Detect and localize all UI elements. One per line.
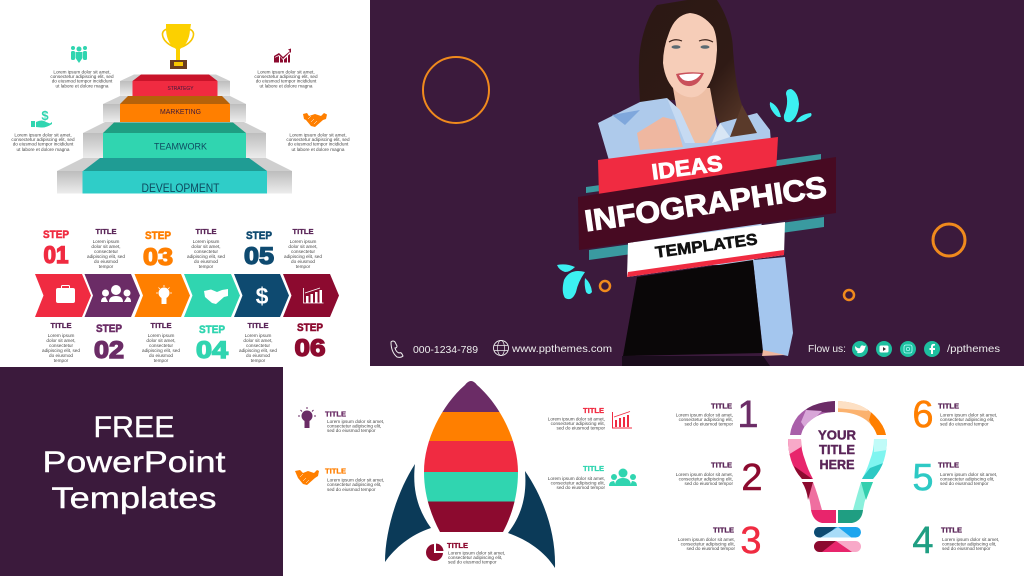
text: bottom title C: adipiscing elit, sed	[239, 348, 277, 353]
text: lower right description: consectetur adipiscing elit, sed	[286, 137, 350, 142]
text: pie item: sed do eiusmod tempor	[448, 560, 497, 564]
item 4: sed do eiusmod tempor	[942, 546, 991, 551]
text: team item: TITLE	[583, 464, 604, 473]
text: bottom title B: consectetur	[149, 343, 173, 348]
text: top title B	[187, 227, 225, 269]
icon: handshake	[295, 470, 319, 485]
item 2	[676, 457, 763, 499]
text: top title B: adipiscing elit, sed	[187, 254, 225, 259]
step 06	[294, 322, 326, 362]
item 4: consectetur adipiscing elit,	[942, 542, 996, 546]
item 6: TITLE	[938, 402, 959, 410]
icon: money in hand	[31, 108, 52, 128]
text: chart item: Lorem ipsum dolor sit amet,	[548, 416, 605, 422]
footer: website	[494, 340, 612, 356]
text: bottom title B: adipiscing elit, sed	[142, 348, 180, 353]
text: top left description: consectetur adipiscing elit, sed	[50, 74, 114, 79]
text: lower left description: consectetur adipiscing elit, sed	[11, 137, 75, 142]
footer: phone: 000-1234-789	[413, 344, 478, 356]
ribbon: infographics: INFOGRAPHICS	[583, 171, 829, 238]
decoration: medium orange ring	[933, 224, 965, 256]
text: team item: sed do eiusmod tempor	[556, 485, 605, 490]
item 1: 1	[737, 394, 759, 436]
step: strategy	[132, 74, 218, 96]
text: top left description: Lorem ipsum dolor sit amet,	[53, 70, 111, 74]
text: top title C: consectetur	[291, 249, 315, 254]
item 2: TITLE	[711, 460, 732, 470]
text: lower left description: do eiusmod tempor incididunt	[13, 142, 74, 146]
panel: rocket infographic	[295, 378, 637, 568]
text: handshake item	[325, 466, 384, 492]
item 2: consectetur adipiscing elit,	[679, 476, 733, 482]
text: handshake item: Lorem ipsum dolor sit amet,	[327, 478, 384, 482]
step 05	[244, 230, 274, 270]
step 02	[94, 323, 124, 364]
bulb: left lower segment	[802, 482, 822, 510]
text: bottom title A: tempor	[54, 358, 69, 363]
item 2: Lorem ipsum dolor sit amet,	[676, 472, 733, 477]
rocket left fin	[385, 464, 431, 562]
step: development: DEVELOPMENT	[142, 183, 220, 195]
decoration: large orange ring	[423, 57, 489, 123]
step 05: STEP	[246, 230, 272, 242]
text: top title B: Lorem ipsum	[193, 239, 220, 244]
text: pie item: TITLE	[447, 541, 468, 550]
bulb: right upper segment	[862, 439, 887, 479]
step 06: 06	[294, 335, 326, 362]
footer: social links: /ppthemes	[947, 343, 1000, 355]
decoration: cyan splash bottom	[557, 264, 592, 299]
panel: chevron process	[35, 227, 339, 364]
text: top left description: do eiusmod tempor incididunt	[52, 78, 113, 84]
step: marketing	[120, 96, 230, 122]
item 3: TITLE	[713, 526, 734, 534]
bulb: bottom right segment	[838, 510, 863, 523]
step 04	[196, 324, 229, 364]
bulb: title: HERE	[820, 457, 855, 472]
text: top title B: consectetur	[194, 249, 218, 254]
text: top left description	[50, 70, 114, 88]
text: top title C: adipiscing elit, sed	[284, 254, 322, 259]
step 01	[43, 229, 69, 269]
step 01: 01	[44, 242, 68, 269]
bulb: title: YOUR	[818, 428, 857, 442]
item 1: TITLE	[711, 402, 732, 410]
footer: social links	[808, 341, 1000, 357]
text: chart item	[548, 406, 605, 430]
text: handshake item: TITLE	[325, 466, 346, 476]
item 4: TITLE	[941, 526, 962, 534]
bulb: left upper segment	[788, 439, 813, 479]
step 04: 04	[196, 337, 229, 364]
text: bottom title C: tempor	[251, 358, 266, 363]
panel: free templates caption	[0, 367, 283, 576]
item 3: sed do eiusmod tempor	[686, 546, 735, 551]
step 03: 03	[143, 244, 173, 271]
text: bulb item	[325, 410, 384, 433]
icon: bar chart	[612, 412, 632, 428]
text: top title C: do eiusmod	[291, 259, 315, 264]
step 03: STEP	[145, 230, 171, 242]
bulb: top right segment	[838, 401, 886, 435]
icon: growth chart	[274, 48, 291, 62]
item 5: TITLE	[938, 460, 959, 470]
bulb: screw band two	[814, 541, 861, 552]
item 3: Lorem ipsum dolor sit amet,	[678, 537, 735, 542]
chevron 5	[234, 274, 289, 317]
text: bottom title A: TITLE	[50, 321, 72, 330]
text: bottom title C: consectetur	[246, 343, 270, 348]
text: top right description: Lorem ipsum dolor sit amet,	[257, 70, 315, 74]
step 03	[143, 230, 173, 271]
text: top title C: TITLE	[292, 227, 314, 236]
step 02: STEP	[96, 323, 122, 335]
text: lower right description: Lorem ipsum dolor sit amet,	[289, 132, 347, 138]
item 3	[678, 520, 762, 562]
panel: hero banner	[370, 0, 1024, 366]
text: top title B: TITLE	[196, 227, 216, 236]
text: bottom title C: do eiusmod	[246, 353, 270, 358]
bulb: title	[818, 428, 857, 472]
step: teamwork	[103, 122, 246, 158]
rocket body	[420, 378, 522, 532]
text: bottom title A: do eiusmod	[49, 353, 73, 358]
item 2: 2	[741, 457, 763, 499]
text: bottom title A: consectetur	[49, 343, 73, 348]
text: top title A: do eiusmod	[94, 259, 118, 264]
text: lower left description: Lorem ipsum dolor sit amet,	[14, 132, 72, 138]
item 5: consectetur adipiscing elit,	[940, 476, 994, 482]
item 6: 6	[912, 394, 934, 436]
text: top title A: TITLE	[96, 227, 116, 236]
footer: phone	[391, 341, 478, 357]
ribbon: templates	[627, 222, 785, 277]
text: bottom title A: dolor sit amet,	[46, 338, 76, 343]
chevron 2	[84, 274, 140, 317]
item 5: 5	[912, 457, 934, 499]
item 4	[912, 520, 999, 562]
text: chart item: sed do eiusmod tempor	[556, 426, 605, 430]
icon: team	[609, 468, 637, 486]
text: bottom title A	[42, 321, 80, 363]
text: bottom title B	[142, 321, 180, 363]
item 4: 4	[912, 520, 934, 562]
text: top title A: consectetur	[94, 249, 118, 254]
text: bottom title B: dolor sit amet,	[146, 338, 176, 343]
panel: staircase infographic	[11, 24, 350, 195]
item 6: sed do eiusmod tempor	[940, 422, 989, 426]
step: strategy: STRATEGY	[168, 86, 194, 92]
text: bottom title C: Lorem ipsum	[245, 333, 272, 338]
text: top title A	[87, 227, 125, 269]
text: bottom title A: Lorem ipsum	[48, 333, 75, 338]
text: bottom title B: do eiusmod	[149, 353, 173, 358]
ribbon: ideas: IDEAS	[650, 151, 724, 185]
text: top title A: dolor sit amet,	[91, 244, 121, 249]
bulb: right lower segment	[853, 482, 873, 510]
item 3: consectetur adipiscing elit,	[681, 542, 735, 546]
text: top left description: ut labore et dolore magna	[56, 84, 109, 88]
item 6	[912, 394, 997, 436]
item 1: consectetur adipiscing elit,	[679, 417, 733, 422]
text: bottom title B: tempor	[154, 358, 169, 363]
bulb: bottom left segment	[811, 510, 836, 523]
text: top title C	[284, 227, 322, 269]
bulb: screw band one	[814, 527, 861, 538]
ribbon: ideas	[598, 137, 778, 197]
text: top title A: Lorem ipsum	[93, 239, 120, 244]
item 6: consectetur adipiscing elit,	[940, 417, 994, 422]
panel: light bulb infographic	[676, 394, 999, 562]
decoration: small orange ring right	[844, 290, 854, 300]
decoration: small orange ring left	[600, 281, 610, 291]
footer: website: www.ppthemes.com	[511, 343, 612, 355]
text: bottom title A: adipiscing elit, sed	[42, 348, 80, 353]
text: top title C: Lorem ipsum	[290, 239, 317, 244]
text: top right description	[254, 70, 318, 88]
ribbon: infographics	[578, 157, 836, 250]
text: lower right description	[286, 132, 350, 152]
text: top title A: adipiscing elit, sed	[87, 254, 125, 259]
text: pie item: Lorem ipsum dolor sit amet,	[448, 550, 505, 556]
text: handshake item: consectetur adipiscing elit,	[327, 482, 381, 487]
bulb: top left segment	[790, 401, 835, 435]
step: teamwork: TEAMWORK	[154, 142, 208, 152]
step 02: 02	[94, 337, 124, 364]
text: chart item: TITLE	[583, 406, 604, 415]
chevron 6	[283, 274, 339, 317]
heading: powerpoint: PowerPoint	[42, 446, 226, 479]
text: top title C: dolor sit amet,	[288, 244, 318, 249]
icon: trophy	[162, 24, 194, 69]
text: lower right description: ut labore et dolore magna	[292, 147, 345, 152]
chevron 5: $	[256, 283, 269, 309]
chevron 1	[35, 274, 91, 317]
item 1: Lorem ipsum dolor sit amet,	[676, 412, 733, 418]
text: bottom title B: Lorem ipsum	[148, 333, 175, 338]
text: top title A: tempor	[99, 264, 114, 269]
text: top right description: do eiusmod tempor incididunt	[256, 78, 317, 84]
text: bulb item: sed do eiusmod tempor	[327, 428, 376, 433]
text: pie item: consectetur adipiscing elit,	[448, 555, 502, 560]
step: development	[82, 158, 267, 195]
item 5	[912, 457, 997, 499]
ribbon: templates: TEMPLATES	[654, 231, 759, 262]
photo: woman pointing	[598, 0, 793, 366]
text: bulb item: consectetur adipiscing elit,	[327, 424, 381, 428]
item 6: Lorem ipsum dolor sit amet,	[940, 412, 997, 418]
chevron 3	[134, 274, 190, 317]
step 01: STEP	[43, 229, 69, 241]
icon: pie chart	[426, 544, 444, 561]
icon: money in hand: $	[41, 108, 49, 123]
step 04: STEP	[199, 324, 225, 336]
step 05: 05	[244, 243, 274, 270]
heading: free: FREE	[94, 411, 174, 444]
text: team item: Lorem ipsum dolor sit amet,	[548, 476, 605, 481]
item 3: 3	[740, 520, 762, 562]
step 06: STEP	[297, 322, 323, 334]
icon: team	[71, 46, 87, 63]
text: chart item: consectetur adipiscing elit,	[551, 421, 605, 426]
item 1	[676, 394, 759, 436]
text: top title B: tempor	[199, 264, 214, 269]
decoration: cyan splash top	[770, 89, 812, 122]
step: marketing: MARKETING	[160, 109, 201, 116]
text: bottom title B: TITLE	[150, 321, 172, 330]
stairs: grey side blocks	[57, 74, 292, 194]
text: bottom title C: dolor sit amet,	[243, 338, 273, 343]
ribbon: teal stripes	[586, 154, 824, 260]
text: top right description: ut labore et dolore magna	[260, 84, 313, 88]
bulb: title: TITLE	[819, 442, 855, 457]
text: bulb item: TITLE	[325, 410, 346, 418]
text: bottom title C	[239, 321, 277, 363]
text: lower left description	[11, 132, 75, 152]
heading: templates: Templates	[52, 482, 216, 515]
text: lower right description: do eiusmod tempor incididunt	[288, 142, 349, 146]
footer: social links: Flow us:	[808, 343, 846, 355]
text: team item: consectetur adipiscing elit,	[551, 480, 605, 486]
text: lower left description: ut labore et dolore magna	[17, 147, 70, 152]
rocket right fin	[508, 471, 555, 568]
text: pie item	[447, 541, 505, 564]
text: top title B: do eiusmod	[194, 259, 218, 264]
item 5: sed do eiusmod tempor	[940, 481, 989, 486]
icon: light bulb	[298, 407, 316, 428]
item 4: Lorem ipsum dolor sit amet,	[942, 537, 999, 542]
text: handshake item: sed do eiusmod tempor	[327, 487, 376, 492]
text: top right description: consectetur adipiscing elit, sed	[254, 74, 318, 79]
text: bulb item: Lorem ipsum dolor sit amet,	[327, 419, 384, 424]
text: bottom title C: TITLE	[248, 321, 268, 330]
icon: handshake	[303, 113, 327, 127]
chevron 4	[184, 274, 240, 317]
item 2: sed do eiusmod tempor	[684, 481, 733, 486]
text: team item	[548, 464, 605, 490]
text: top title C: tempor	[296, 264, 311, 269]
text: top title B: dolor sit amet,	[191, 244, 221, 249]
item 5: Lorem ipsum dolor sit amet,	[940, 472, 997, 477]
item 1: sed do eiusmod tempor	[684, 422, 733, 426]
